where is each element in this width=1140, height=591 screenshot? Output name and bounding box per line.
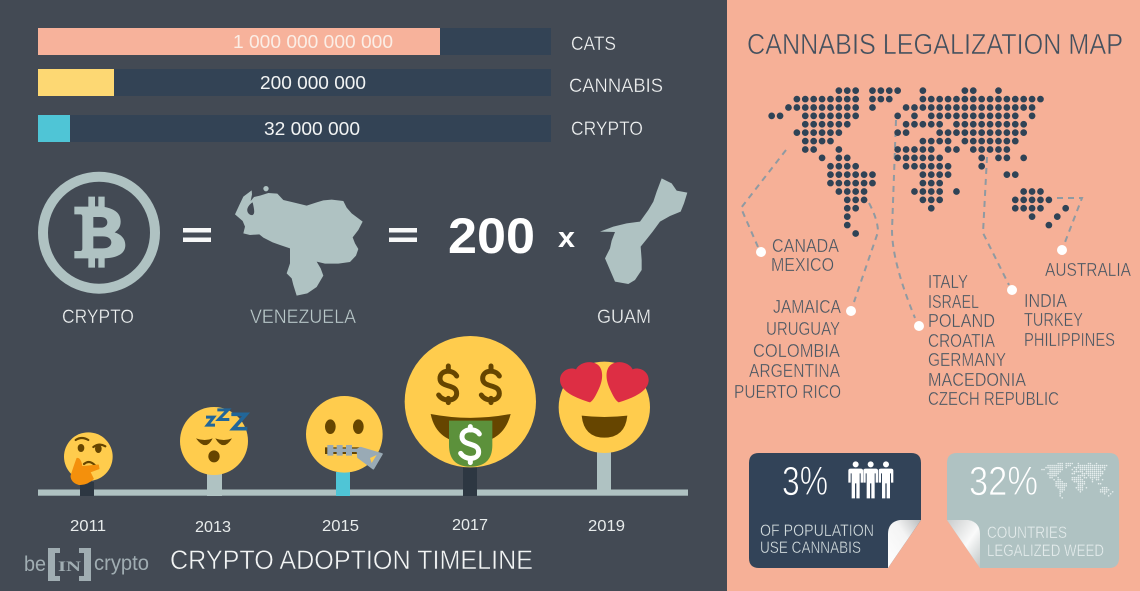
caption: USE CANNABIS <box>760 539 861 557</box>
label: venezuela: VENEZUELA <box>250 307 356 328</box>
icon: zipper mouth face <box>306 396 383 473</box>
bar: crypto: CRYPTO <box>571 119 643 140</box>
country list: latin america: JAMAICA <box>773 296 842 317</box>
country list: europe: MACEDONIA <box>928 369 1027 390</box>
icon: guam map <box>600 178 687 284</box>
bar: cannabis: 200 000 000 <box>260 72 366 93</box>
country list: europe: GERMANY <box>928 349 1006 370</box>
dotted world map <box>772 91 1066 233</box>
panel: left dark background <box>0 0 727 591</box>
country list: europe <box>928 271 1059 409</box>
stem: 2017 <box>463 467 477 496</box>
stat card: population <box>749 453 921 568</box>
country list: latin america: ARGENTINA <box>749 360 841 381</box>
page curl <box>947 520 980 568</box>
stem: 2013 <box>207 474 222 496</box>
icon: sleeping face <box>180 407 248 475</box>
bar: crypto: 32 000 000 <box>264 118 360 139</box>
country list: latin america <box>734 296 842 402</box>
stat card: countries <box>947 453 1119 568</box>
heading: crypto adoption timeline: CRYPTO ADOPTION TIMELINE <box>170 545 533 575</box>
bar: crypto <box>38 115 643 142</box>
caption: COUNTRIES <box>987 524 1067 542</box>
country list: europe: ITALY <box>928 271 968 292</box>
country list: europe: ISRAEL <box>928 291 979 312</box>
caption <box>987 524 1104 560</box>
year labels: 2017 <box>452 517 488 534</box>
year labels: 2011 <box>70 518 106 535</box>
logo: beincrypto <box>24 548 149 581</box>
year labels: 2013 <box>195 519 231 536</box>
timeline axis <box>38 490 688 496</box>
panel: right salmon background <box>727 0 1140 591</box>
icon: thinking face <box>64 432 113 484</box>
icon: equals sign <box>389 228 417 242</box>
icon: heart eyes face <box>559 362 650 453</box>
bar: cats: 1 000 000 000 000 <box>233 31 393 52</box>
label: guam: GUAM <box>597 307 651 328</box>
country list: north america <box>771 235 840 275</box>
logo: beincrypto: be <box>24 553 46 576</box>
logo: beincrypto: crypto <box>94 552 149 575</box>
year labels: 2019 <box>588 518 625 535</box>
connector lines: dashed <box>741 120 1082 318</box>
stat: 3%: 3% <box>782 458 828 504</box>
stem: 2019 <box>597 452 611 491</box>
stem: 2015 <box>336 472 350 496</box>
number: 200: 200 <box>448 208 535 264</box>
bar chart: population comparison <box>38 28 663 142</box>
stem: 2011 <box>80 482 94 496</box>
caption: OF POPULATION <box>760 522 874 540</box>
year labels: 2015 <box>322 518 359 535</box>
marker dots <box>756 245 1067 331</box>
icon: money mouth face <box>405 336 536 467</box>
country list: europe: CZECH REPUBLIC <box>928 388 1059 409</box>
country list: north america: MEXICO <box>771 254 834 275</box>
country list: latin america: COLOMBIA <box>753 340 841 361</box>
icon: equals sign <box>183 228 211 242</box>
country list: asia: TURKEY <box>1024 309 1083 330</box>
country list: europe: CROATIA <box>928 330 996 351</box>
icon: bitcoin coin <box>43 177 155 289</box>
icon: three people <box>848 461 893 498</box>
country list: latin america: URUGUAY <box>766 318 840 339</box>
country list: asia <box>1024 290 1115 350</box>
country list: europe: POLAND <box>928 310 995 331</box>
icon: venezuela map <box>235 186 363 296</box>
multiply sign: x <box>558 222 575 254</box>
label: crypto: CRYPTO <box>62 307 134 328</box>
timeline: crypto adoption <box>38 336 688 536</box>
country list: asia: PHILIPPINES <box>1024 329 1115 350</box>
country list: north america: CANADA <box>772 235 840 256</box>
stat: 32%: 32% <box>969 458 1038 504</box>
country list: asia: INDIA <box>1024 290 1068 311</box>
caption <box>760 522 874 557</box>
page curl <box>888 520 921 568</box>
caption: LEGALIZED WEED <box>987 542 1104 560</box>
bar: cats <box>38 28 616 55</box>
bar: cats: CATS <box>571 34 616 55</box>
logo: beincrypto: IN <box>58 559 81 575</box>
bar: cannabis <box>38 69 663 97</box>
bar: cannabis: CANNABIS <box>569 76 663 97</box>
year labels <box>70 517 625 536</box>
country list: latin america: PUERTO RICO <box>734 381 841 402</box>
icon: mini world map <box>1042 464 1113 498</box>
